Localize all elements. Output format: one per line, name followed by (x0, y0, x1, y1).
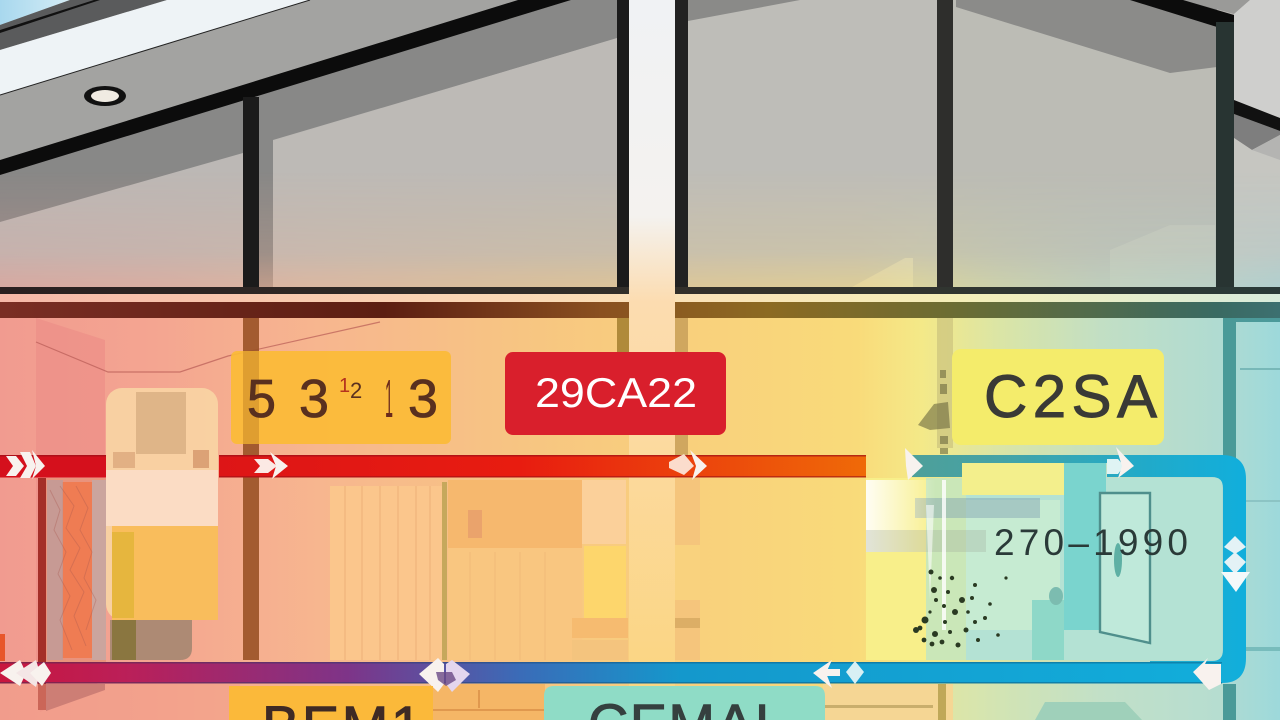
label: 5 3 1 2 1 3: 3 (408, 369, 438, 429)
arrow: marker 6 (813, 660, 864, 688)
label: 5 3 1 2 1 3: 3 (299, 369, 329, 429)
label: C2SA: C2SA (984, 363, 1157, 430)
interior: cabinet panels (330, 478, 700, 660)
label: 5 3 1 2 1 3: 2 (350, 378, 362, 403)
label: 5 3 1 2 1 3: 1 (385, 369, 393, 429)
arrow: marker 2 (669, 450, 707, 480)
interior: left wall and artwork (0, 318, 380, 712)
icon: hanging lamp (918, 370, 950, 454)
window frame: mullions and transom (0, 0, 1280, 318)
label: C2SA (952, 349, 1164, 445)
colour wash overlay (0, 202, 1280, 720)
label: 5 3 1 2 1 3: 5 (247, 369, 276, 429)
arrow: exit chevrons (0, 660, 51, 687)
white central column (629, 0, 675, 720)
label: 270-1990 range: 270–1990 (994, 522, 1188, 563)
arrow: entry chevrons (6, 450, 45, 479)
arrow: double-headed marker (419, 658, 470, 692)
arrow: marker 1 (254, 452, 288, 479)
interior: lower mullions (243, 318, 1280, 720)
label: 29CA22: 29CA22 (535, 369, 697, 416)
label: CEMAL cut off (544, 686, 825, 720)
lower interior scene (0, 318, 1280, 720)
arrow: marker 5 (1193, 658, 1221, 690)
icon: speckled plant (913, 570, 1008, 648)
label: BEM1 cut off (229, 686, 433, 720)
flow path: bottom gradient segment (0, 662, 1222, 684)
arrows: down chevrons (1221, 536, 1250, 592)
arrow: marker 4 (1107, 447, 1134, 478)
ceiling: sloped soffit and skylight (0, 0, 620, 290)
label: 5 3 1 2 1 3: 1 (339, 375, 350, 397)
arrow: marker 3 (905, 448, 923, 480)
interior: floor band (0, 684, 1223, 720)
icon: ceiling downlight (84, 86, 126, 106)
right bay panes (688, 0, 1280, 287)
label: 5 3 1 2 1 3 (231, 351, 451, 444)
arrows along top path (0, 447, 1250, 692)
label: 29CA22 (505, 352, 726, 435)
flow path: teal segment with rounded corner (912, 455, 1246, 683)
flow path: top red segment (0, 455, 866, 478)
interior: tall cabinet (106, 388, 218, 660)
interior: right room with art and sketch (866, 370, 1222, 660)
